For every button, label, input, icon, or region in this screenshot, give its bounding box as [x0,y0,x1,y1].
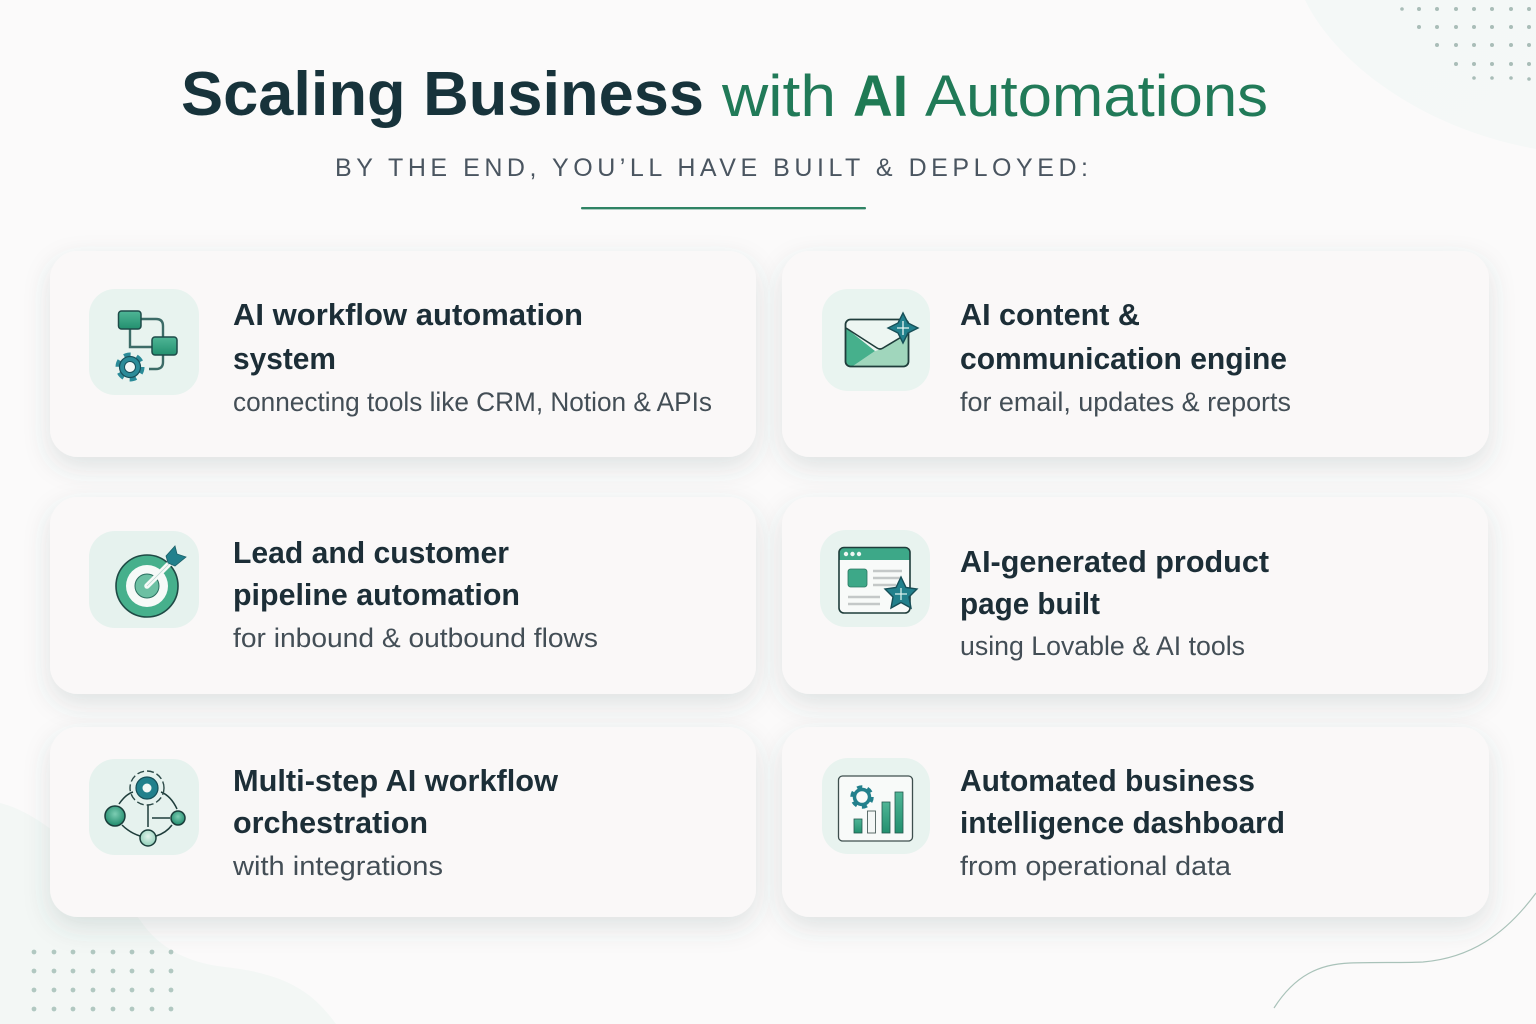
icon: envelope with sparkle [822,289,930,391]
description: for inbound & outbound flows [233,623,598,653]
panel: multi-step AI workflow orchestration [50,727,756,917]
decorative curve: bottom right [1274,893,1536,1008]
description: with integrations [232,851,443,881]
description: using Lovable & AI tools [960,631,1245,661]
panel: lead and customer pipeline automation [50,497,756,694]
description: from operational data [960,851,1232,881]
heading: Automated business [960,763,1255,798]
description: for email, updates & reports [960,387,1291,417]
subtitle: BY THE END, YOU’LL HAVE BUILT & DEPLOYED: [335,154,1088,182]
title: AI [853,64,908,129]
heading: AI content & [960,297,1140,332]
description: connecting tools like CRM, Notion & APIs [233,387,712,417]
title [181,60,1268,129]
panel: AI-generated product page [782,497,1488,694]
heading line two: orchestration [233,805,428,840]
decorative corner blob: bottom left [0,803,336,1024]
panel: AI workflow automation system [50,251,756,457]
heading line two: intelligence dashboard [960,805,1285,840]
heading line two: page built [960,586,1100,621]
decorative dot grid: top right [1400,7,1531,81]
icon: web page with star [820,530,930,627]
panel: automated business intelligence dashboard [782,727,1489,917]
heading line two: communication engine [960,341,1287,376]
heading line two: system [233,341,336,376]
decorative dot grid: bottom left [32,950,173,1011]
icon: target with arrow [89,531,199,628]
heading: AI-generated product [960,544,1269,579]
title: Automations [925,64,1268,129]
title: Scaling Business [181,60,704,129]
panel: AI content and communication engine [782,251,1489,457]
heading: Multi-step AI workflow [233,763,559,798]
heading line two: pipeline automation [233,577,520,612]
decorative corner blob: top right [1305,0,1536,149]
icon: workflow with gear [89,289,199,395]
title: with [721,64,836,129]
heading: Lead and customer [233,535,509,570]
icon: dashboard bar chart with gear [822,758,930,854]
heading: AI workflow automation [233,297,583,332]
icon: orchestration nodes [89,759,199,855]
